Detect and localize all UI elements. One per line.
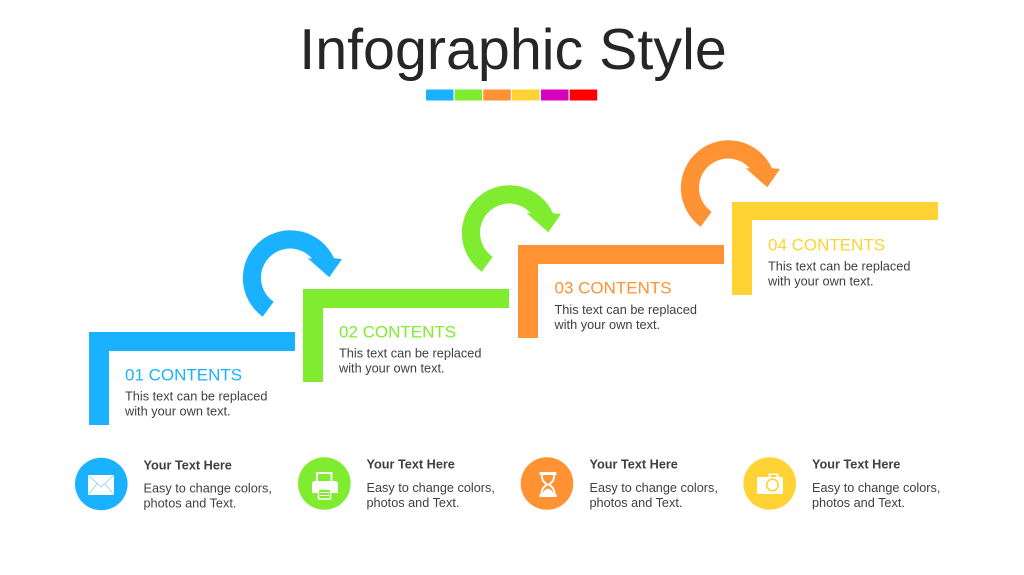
arrow 3 (681, 140, 780, 227)
step 2 text: with your own text. (338, 360, 445, 376)
feature 4 text (812, 458, 940, 510)
step 4 text (767, 235, 910, 288)
step 2 text: This text can be replaced (339, 346, 481, 360)
arrow 1 (243, 230, 342, 317)
icon: hourglass (521, 457, 573, 510)
step 2 text: 02 CONTENTS (339, 322, 456, 341)
icon: printer (298, 457, 351, 510)
step 3 text (554, 278, 697, 332)
step 4 text: with your own text. (767, 274, 874, 288)
step 3 text: This text can be replaced (554, 302, 697, 317)
step 3 text: with your own text. (554, 317, 660, 332)
step 3 text: 03 CONTENTS (554, 278, 672, 297)
icon: camera (743, 457, 796, 510)
feature 3 text: photos and Text. (590, 496, 682, 510)
arrow 2 (462, 185, 561, 272)
colour bar (426, 90, 597, 100)
step 4 text: 04 CONTENTS (768, 235, 885, 254)
step 1 text: 01 CONTENTS (125, 365, 242, 384)
step 4 text: This text can be replaced (768, 258, 910, 274)
feature 4 text: Easy to change colors, (812, 481, 940, 495)
feature 1 text: Your Text Here (144, 458, 232, 472)
feature 3 text: Your Text Here (590, 458, 678, 472)
feature 4 text: photos and Text. (812, 496, 905, 510)
feature 2 text: Your Text Here (366, 458, 455, 472)
feature 1 text: photos and Text. (144, 496, 236, 510)
feature 1 text (144, 458, 272, 510)
step 1 bracket (89, 332, 295, 425)
step 3 bracket (518, 245, 724, 338)
title: Infographic Style (299, 18, 727, 82)
step 1 text (124, 365, 267, 418)
feature 4 text: Your Text Here (812, 458, 900, 472)
feature 3 text: Easy to change colors, (590, 481, 718, 495)
feature 2 text (366, 458, 495, 510)
step 2 bracket (303, 289, 509, 382)
step 2 text (338, 322, 481, 376)
step 1 text: This text can be replaced (125, 388, 267, 404)
feature 3 text (590, 458, 718, 510)
icon: mail (75, 458, 128, 510)
step 1 text: with your own text. (124, 404, 231, 418)
feature 2 text: photos and Text. (366, 496, 459, 510)
feature 1 text: Easy to change colors, (144, 482, 272, 496)
step 4 bracket (732, 202, 938, 295)
feature 2 text: Easy to change colors, (366, 481, 495, 495)
